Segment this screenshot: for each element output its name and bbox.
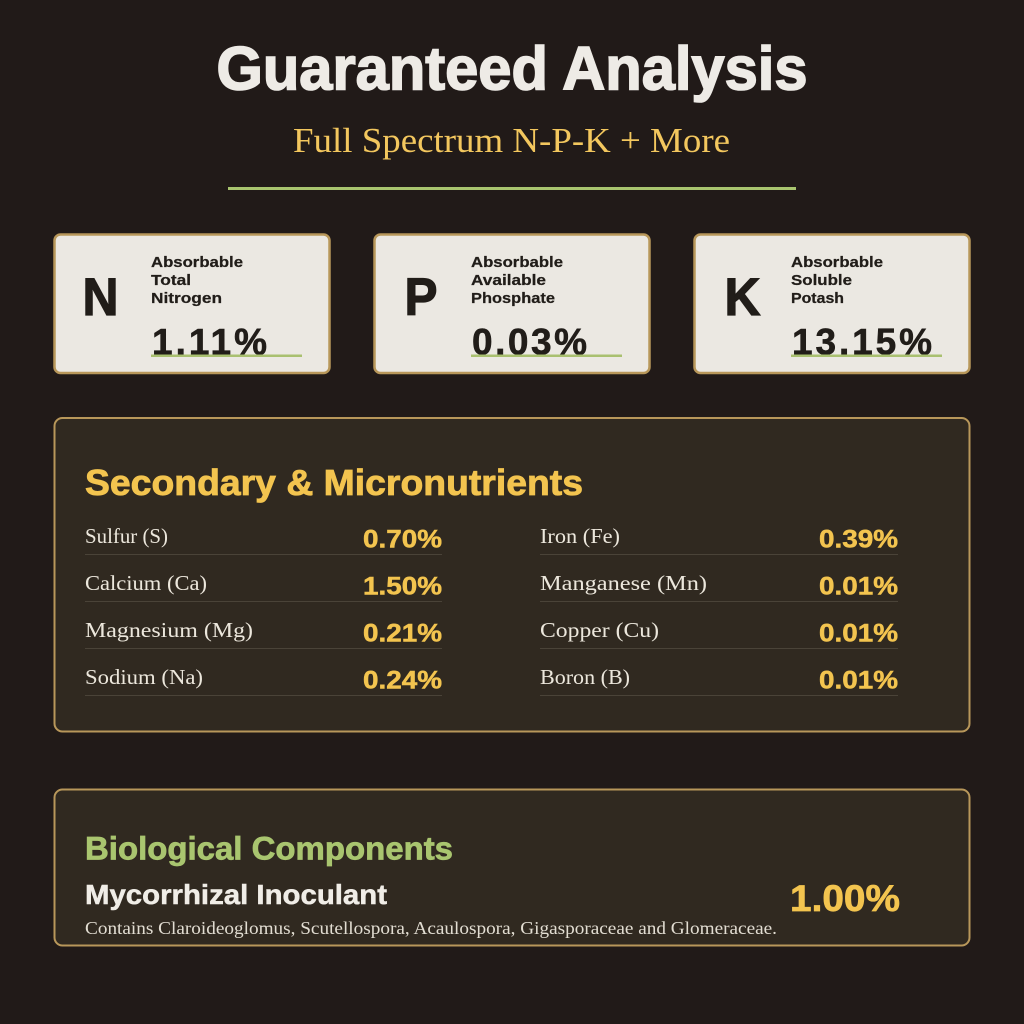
panel: phosphate card <box>374 234 650 373</box>
row: boron <box>540 665 898 694</box>
row: sodium: Sodium (Na) <box>85 665 203 689</box>
phosphate label: Available <box>471 272 546 289</box>
phosphate label: Absorbable <box>471 254 563 271</box>
potash label: Potash <box>791 290 844 307</box>
row: boron: Boron (B) <box>540 665 630 689</box>
panel: potash card <box>694 234 970 373</box>
row: calcium: 1.50% <box>363 572 442 600</box>
nitrogen label <box>151 254 243 307</box>
row: magnesium <box>85 618 442 648</box>
row: magnesium: Magnesium (Mg) <box>85 618 253 642</box>
title: Guaranteed Analysis <box>216 34 808 102</box>
row: sulfur: Sulfur (S) <box>85 524 168 548</box>
row: copper: 0.01% <box>819 620 898 648</box>
row: manganese: Manganese (Mn) <box>540 571 707 595</box>
row: sulfur <box>85 524 442 554</box>
row: iron <box>540 524 898 554</box>
nitrogen letter: N <box>82 268 118 327</box>
potash label: Absorbable <box>791 254 883 271</box>
potash value: 13.15% <box>792 322 932 362</box>
heading: biological components: Biological Components <box>85 830 453 866</box>
row: copper: Copper (Cu) <box>540 618 659 642</box>
row: sodium: 0.24% <box>363 666 442 694</box>
phosphate letter: P <box>404 268 438 327</box>
mycorrhizal inoculant name: Mycorrhizal Inoculant <box>85 879 387 910</box>
potash letter: K <box>724 268 760 327</box>
subtitle: Full Spectrum N-P-K + More <box>293 121 730 160</box>
phosphate label <box>471 254 563 307</box>
row: manganese: 0.01% <box>819 572 898 600</box>
species description: Contains Claroideoglomus, Scutellospora, Acaulospora, Gigasporaceae and Glomeraceae. <box>85 918 777 938</box>
heading: secondary and micronutrients: Secondary & Micronutrients <box>85 462 583 503</box>
phosphate value: 0.03% <box>472 322 587 362</box>
mycorrhizal value: 1.00% <box>790 878 900 919</box>
row: calcium: Calcium (Ca) <box>85 571 207 595</box>
row: sulfur: 0.70% <box>363 526 442 554</box>
row: sodium <box>85 665 442 694</box>
nitrogen label: Nitrogen <box>151 290 222 307</box>
row: iron: Iron (Fe) <box>540 524 620 548</box>
row: manganese <box>540 571 898 600</box>
row: boron: 0.01% <box>819 666 898 694</box>
row: calcium <box>85 571 442 600</box>
row: magnesium: 0.21% <box>363 620 442 648</box>
panel: nitrogen card <box>54 234 330 373</box>
nitrogen label: Total <box>151 272 191 289</box>
nitrogen value: 1.11% <box>152 322 267 362</box>
panel: biological components <box>54 790 970 946</box>
phosphate label: Phosphate <box>471 290 555 307</box>
panel: secondary and micronutrients <box>54 418 970 732</box>
row: iron: 0.39% <box>819 526 898 554</box>
potash label: Soluble <box>791 272 852 289</box>
nitrogen label: Absorbable <box>151 254 243 271</box>
row: copper <box>540 618 898 648</box>
potash label <box>791 254 883 307</box>
